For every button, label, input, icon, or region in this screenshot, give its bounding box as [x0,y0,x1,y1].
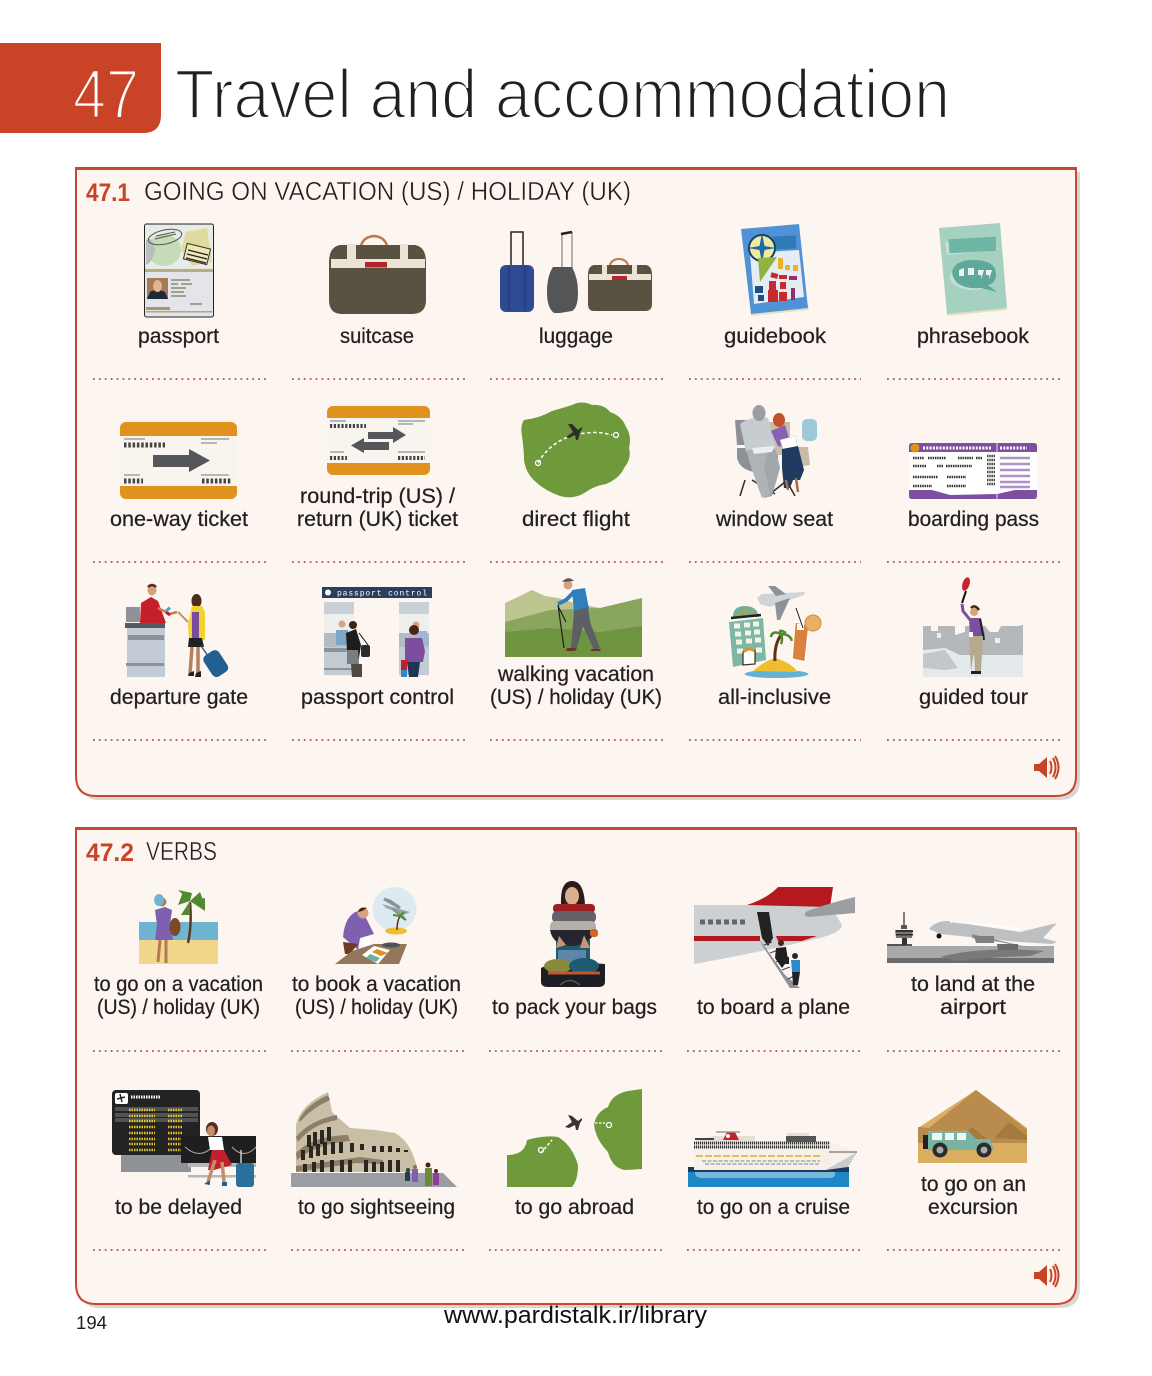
writing lines [93,379,1060,740]
label [297,485,458,531]
label: to go on a cruise [697,1196,850,1219]
icon: passport control: passport control [337,590,427,598]
icon: boarding a plane [694,887,855,988]
panel: going on vacation [76,168,1080,800]
label: to be delayed [115,1196,242,1219]
item: to book a vacation [292,887,461,1019]
icon: phrasebook [939,223,1007,316]
item: luggage [500,232,652,348]
icon: round-trip ticket [327,406,430,475]
label: all-inclusive [718,686,831,709]
item: guidebook [724,224,827,348]
icon: audio speaker [1034,756,1058,779]
item: to go sightseeing [291,1092,457,1219]
icon: direct flight [521,402,630,497]
label [911,973,1035,1019]
icon: beach vacation [139,890,218,964]
label: suitcase [340,325,414,348]
item: guided tour [919,576,1028,709]
icon: audio speaker [1034,1264,1058,1287]
icon: landing plane [887,912,1057,963]
label: to go abroad [515,1196,634,1219]
item: all-inclusive [718,586,831,709]
icon: booking a vacation [335,887,416,964]
label: to go sightseeing [298,1196,455,1219]
label: (US) / holiday (UK) [97,996,260,1019]
icon: departure board and waiting woman [112,1090,256,1187]
label [94,973,263,1019]
item: to land at the airport [887,912,1057,1019]
label: to book a vacation [292,973,461,996]
item: direct flight [521,402,630,531]
label: boarding pass [908,508,1039,531]
icon: departure gate [125,584,230,679]
title: Travel and accommodation [175,55,950,133]
label: guidebook [724,325,827,348]
icon: one-way ticket [120,422,237,499]
item: departure gate [110,584,248,709]
label: passport [138,325,219,348]
label: airport [940,996,1006,1019]
icon: flight abroad [507,1089,642,1187]
label: departure gate [110,686,248,709]
icon: all-inclusive [729,586,821,678]
icon: boarding pass [909,443,1037,499]
panel: verbs [76,828,1080,1308]
item: round-trip ticket [297,406,458,531]
label: round-trip (US) / [300,485,455,508]
icon: colosseum [291,1092,457,1187]
item: phrasebook [917,223,1030,348]
label: phrasebook [917,325,1030,348]
icon: passport control [322,587,432,677]
label: to go on a vacation [94,973,263,996]
icon: walking vacation [505,578,642,657]
panel heading 47.1: 47.1 [86,179,130,207]
label: to board a plane [697,996,850,1019]
label: to go on an [921,1173,1026,1196]
item: to be delayed [112,1090,256,1219]
item: to go on a cruise [688,1132,857,1219]
panel heading 47.2: 47.2 [86,839,134,867]
label: return (UK) ticket [297,508,458,531]
label: guided tour [919,686,1028,709]
label: luggage [539,325,613,348]
item: passport [138,224,219,348]
label: excursion [928,1196,1018,1219]
icon: guided tour [923,576,1023,677]
label: direct flight [522,508,630,531]
label: one-way ticket [110,508,248,531]
item: to board a plane [694,887,855,1019]
label: (US) / holiday (UK) [295,996,458,1019]
page number: 194 [76,1313,107,1333]
chapter number badge: 47 [73,55,139,133]
label: to pack your bags [492,996,657,1019]
item: to go on an excursion [918,1090,1027,1219]
icon: packing bags [541,881,605,987]
label: to land at the [911,973,1035,996]
writing lines [93,1051,1060,1250]
icon: passport [144,224,214,317]
icon: guidebook [741,224,809,316]
item: walking vacation [490,578,662,709]
icon: luggage [500,232,652,313]
label: walking vacation [497,663,654,686]
label: window seat [715,508,833,531]
website watermark: www.pardistalk.ir/library [443,1302,707,1329]
item: suitcase [329,236,426,348]
item: passport control [301,587,454,709]
label [292,973,461,1019]
icon: window seat [735,405,817,498]
label [490,663,662,709]
chapter number badge [0,43,161,133]
label: (US) / holiday (UK) [490,686,662,709]
item: one-way ticket [110,422,248,531]
item: to go abroad [507,1089,642,1219]
icon: cruise ship [688,1132,857,1187]
item: to go on a vacation [94,890,263,1019]
icon: suitcase [329,236,426,314]
item: to pack your bags [492,881,657,1019]
label [921,1173,1026,1219]
panel heading 47.2: VERBS [146,836,217,866]
label: passport control [301,686,454,709]
panel heading 47.2 [86,836,217,867]
panel heading 47.1: GOING ON VACATION (US) / HOLIDAY (UK) [144,176,631,206]
icon: excursion [918,1090,1027,1163]
item: window seat [715,405,833,531]
item: boarding pass [908,443,1039,531]
